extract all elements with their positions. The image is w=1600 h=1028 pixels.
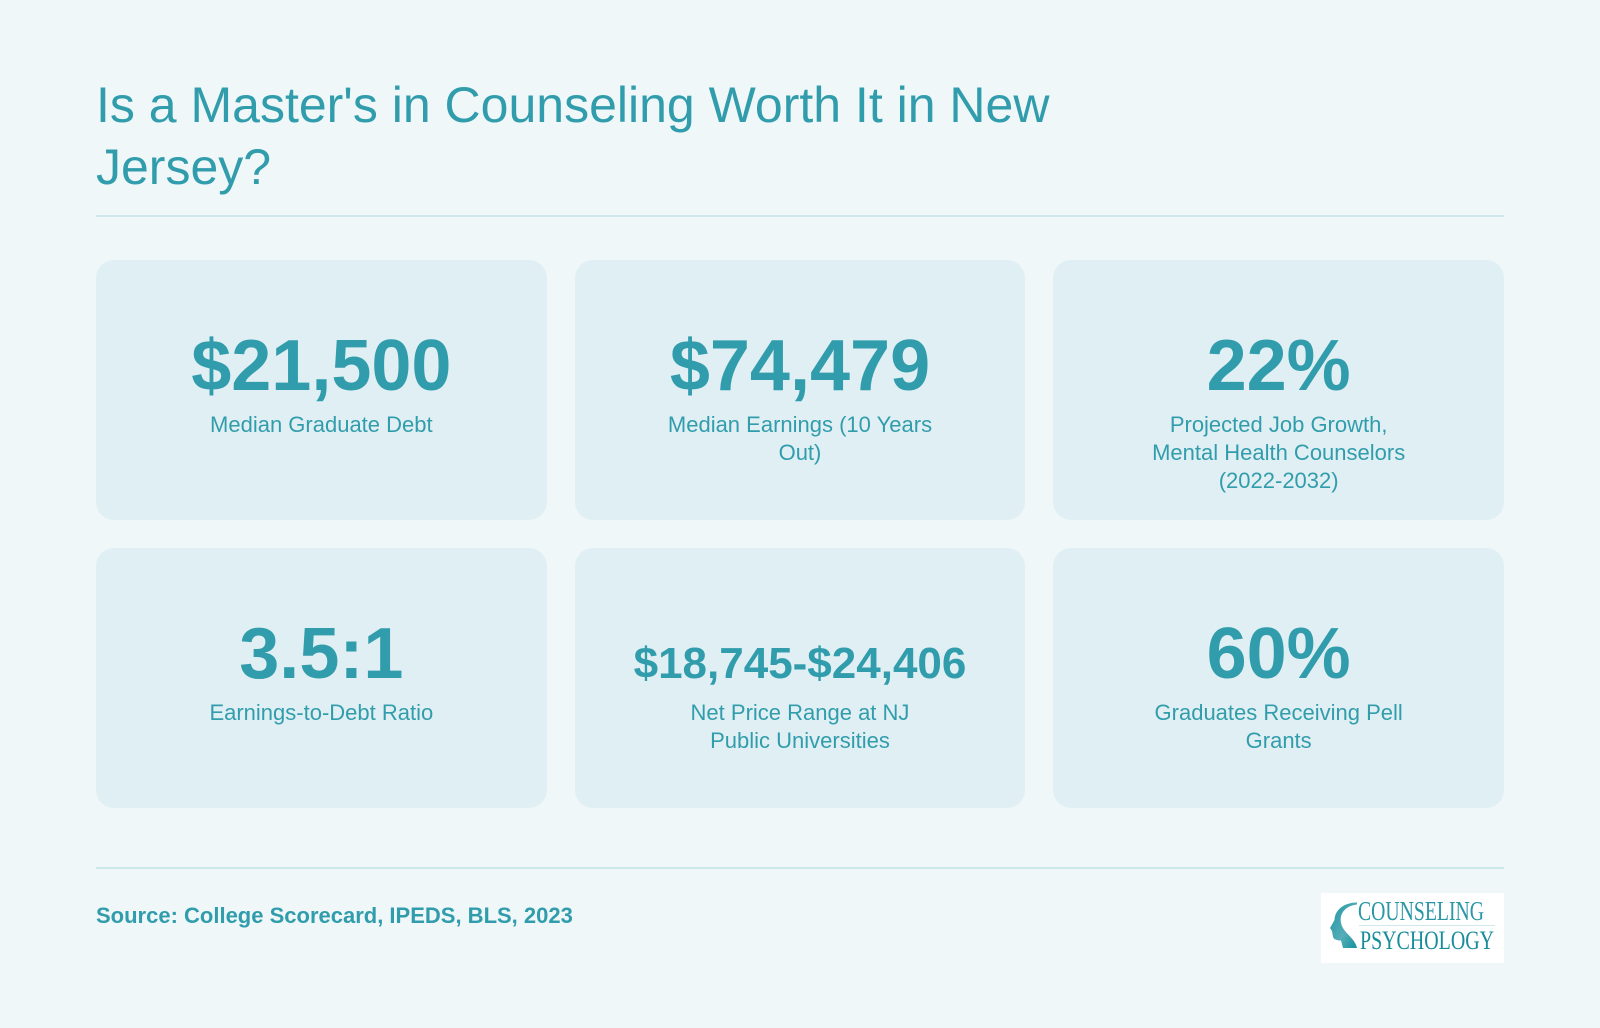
panel: net price range — [575, 548, 1025, 808]
panel: median earnings — [575, 260, 1025, 520]
stat label: Median Earnings (10 Years — [668, 412, 932, 437]
panel: projected job growth — [1053, 260, 1504, 520]
stat label: Median Graduate Debt — [210, 412, 433, 437]
stat label: Out) — [779, 440, 821, 465]
stat value: 3.5:1 — [239, 614, 403, 694]
stat label: Grants — [1246, 728, 1312, 753]
stat value: $21,500 — [191, 326, 451, 406]
stat label — [1155, 700, 1403, 753]
title: Jersey? — [96, 139, 271, 195]
panel: median graduate debt — [96, 260, 547, 520]
stat label: Net Price Range at NJ — [691, 700, 909, 725]
title — [96, 77, 1050, 195]
logo: Counseling Psychology — [1321, 893, 1504, 963]
icon: head profile — [1330, 902, 1357, 948]
panel: pell grants — [1053, 548, 1504, 808]
panel: earnings-to-debt ratio — [96, 548, 547, 808]
stat label — [1152, 412, 1405, 493]
stat value: $18,745-$24,406 — [634, 639, 966, 688]
stat label: Public Universities — [710, 728, 890, 753]
stat value: 60% — [1207, 614, 1351, 694]
stat label: (2022-2032) — [1219, 468, 1339, 493]
stat value: 22% — [1207, 326, 1351, 406]
stat label: Projected Job Growth, — [1170, 412, 1387, 437]
source note: Source: College Scorecard, IPEDS, BLS, 2023 — [96, 903, 573, 928]
stat label: Mental Health Counselors — [1152, 440, 1405, 465]
title: Is a Master's in Counseling Worth It in New — [96, 77, 1049, 133]
stat label: Graduates Receiving Pell — [1155, 700, 1403, 725]
stat value: $74,479 — [670, 326, 930, 406]
stat label: Earnings-to-Debt Ratio — [209, 700, 433, 725]
stat label — [691, 700, 909, 753]
stat label — [668, 412, 932, 465]
